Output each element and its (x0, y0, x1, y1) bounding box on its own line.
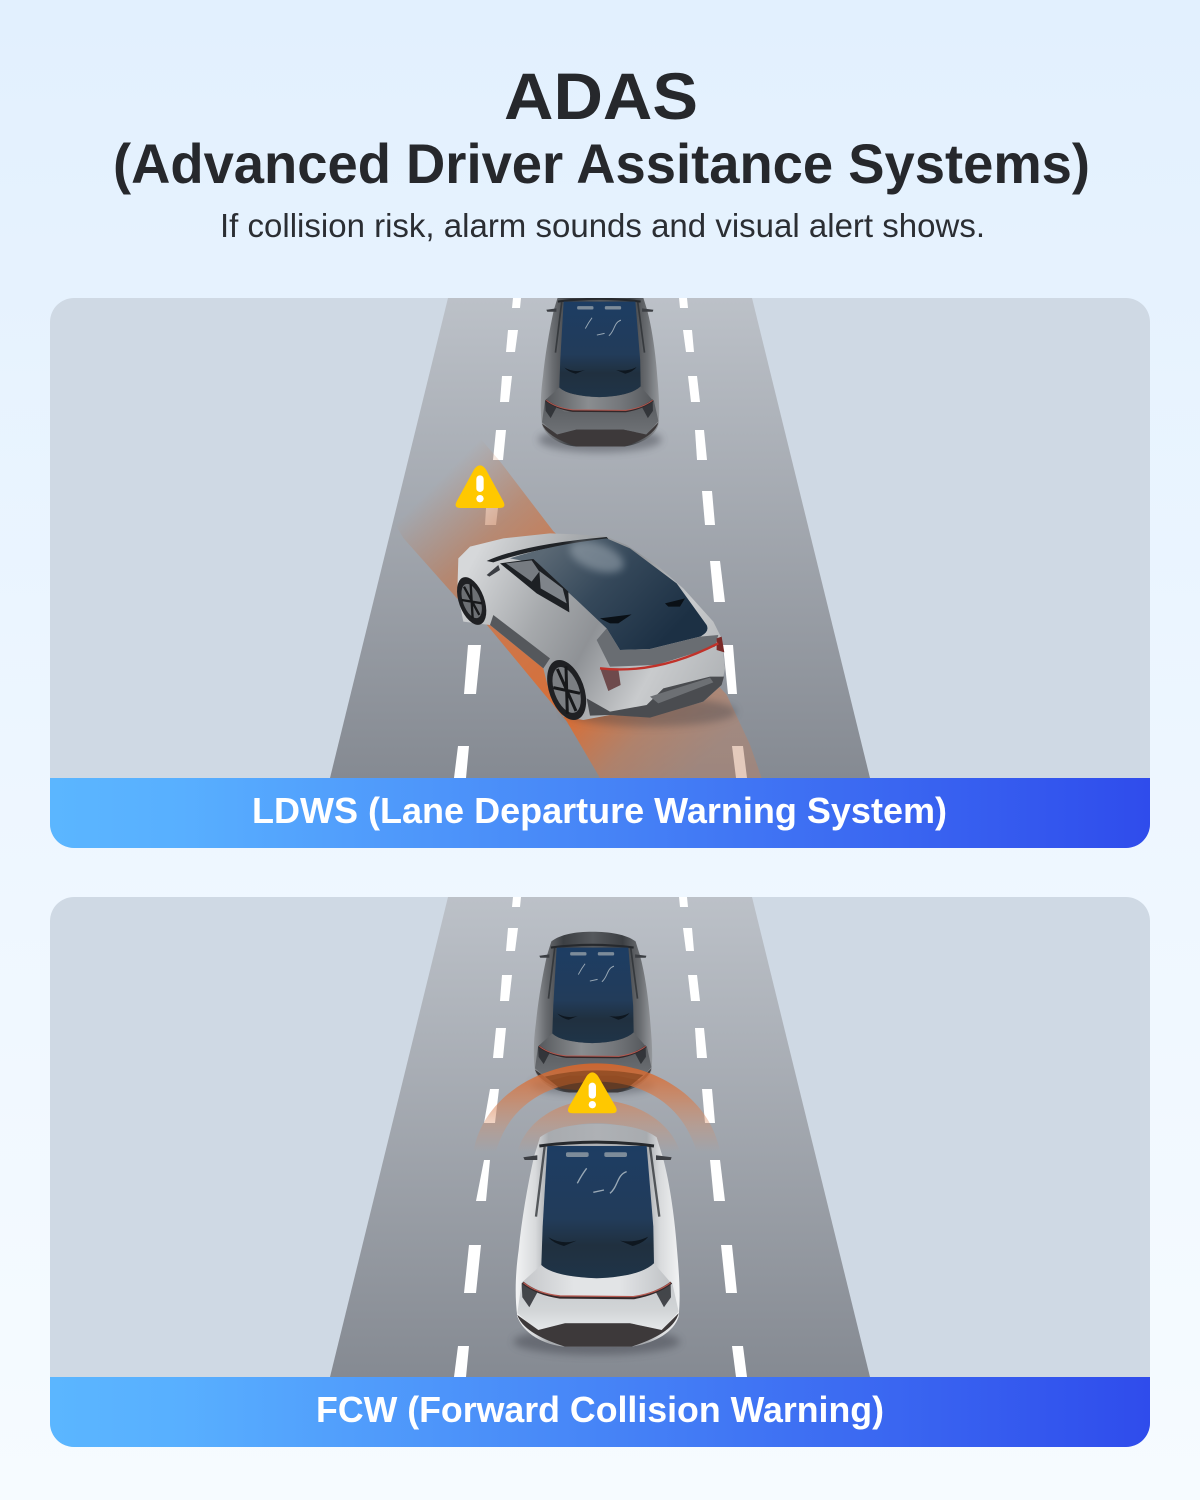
car shadow (538, 427, 662, 452)
icon: warning triangle (568, 1072, 617, 1113)
banner: FCW (50, 1377, 1150, 1447)
lane departure warning band (401, 446, 762, 778)
subtitle heading: (Advanced Driver Assitance Systems) (113, 132, 1090, 195)
icon: warning triangle (456, 465, 504, 508)
panel background (50, 897, 1150, 1447)
car: departing silver vehicle (451, 533, 737, 727)
wheel: front (457, 577, 486, 625)
title: ADAS (504, 59, 698, 133)
car: vehicle ahead (531, 932, 655, 1095)
panel: LDWS (50, 286, 1150, 848)
banner: LDWS: LDWS (Lane Departure Warning System) (252, 790, 947, 831)
wheel: rear (547, 660, 586, 720)
panel background (50, 298, 1150, 778)
car: vehicle ahead (538, 286, 662, 452)
banner: FCW: FCW (Forward Collision Warning) (316, 1389, 884, 1430)
collision warning arcs (476, 1063, 718, 1144)
road (330, 298, 870, 778)
banner: LDWS (50, 778, 1150, 848)
description text: If collision risk, alarm sounds and visual alert shows. (220, 207, 985, 244)
lane markings (454, 298, 747, 778)
lane markings (454, 897, 747, 1377)
car: following silver vehicle (513, 1124, 680, 1355)
road (330, 897, 870, 1377)
panel: FCW (50, 897, 1150, 1447)
